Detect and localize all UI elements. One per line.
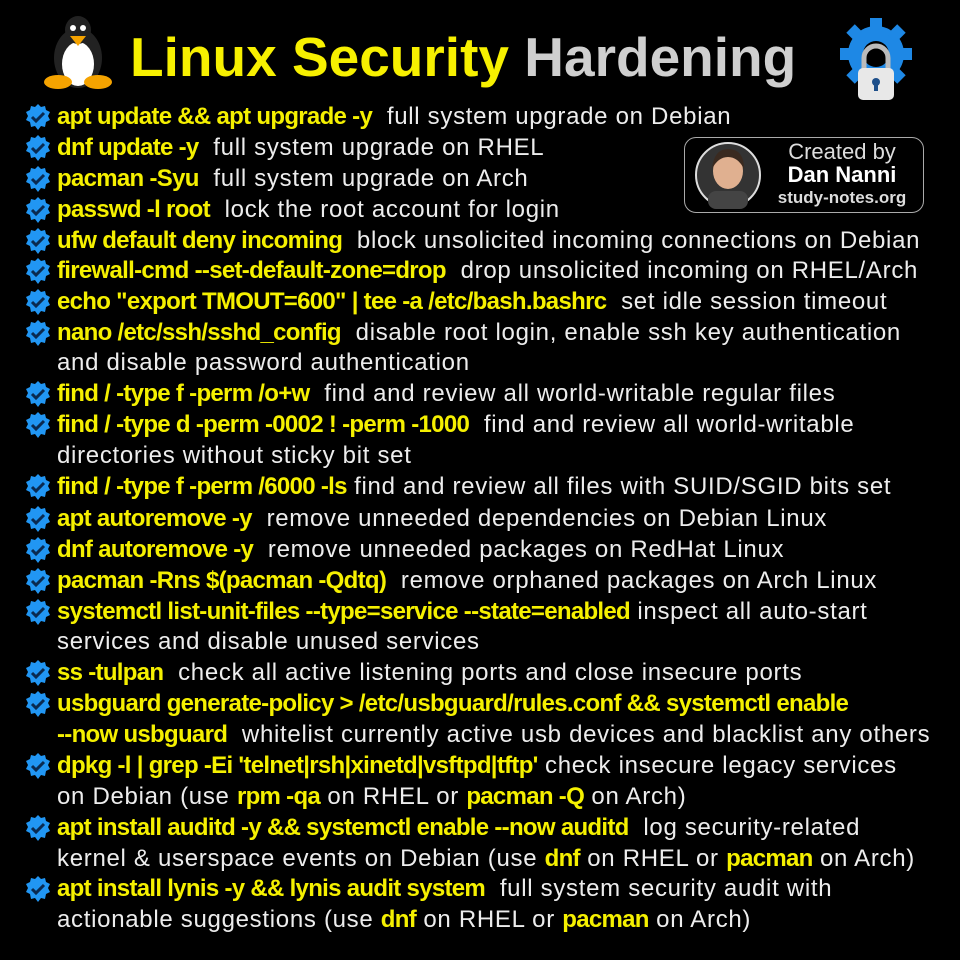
list of commands: pacman -Rns $(pacman -Qdtq) remove orphaned packages on Arch Linux — [57, 567, 877, 594]
list of commands: and disable password authentication — [57, 349, 470, 376]
list of commands: apt update && apt upgrade -y full system upgrade on Debian — [57, 103, 731, 130]
icon: avatar — [695, 142, 761, 209]
title: Linux Security Hardening — [130, 26, 796, 88]
list of commands: actionable suggestions (use dnf on RHEL or pacman on Arch) — [57, 906, 751, 933]
list of commands: services and disable unused services — [57, 628, 480, 655]
list of commands: passwd -l root lock the root account for login — [57, 196, 560, 223]
text: author — [778, 139, 906, 207]
list of commands: apt install auditd -y && systemctl enable --now auditd log security-related — [57, 814, 860, 841]
text: author: study-notes.org — [778, 188, 906, 207]
list of commands: pacman -Syu full system upgrade on Arch — [57, 165, 528, 192]
text: author: Created by — [788, 139, 896, 164]
list of commands: find / -type d -perm -0002 ! -perm -1000 find and review all world-writable — [57, 411, 854, 438]
list of commands: echo "export TMOUT=600" | tee -a /etc/bash.bashrc set idle session timeout — [57, 288, 887, 315]
list of commands: ss -tulpan check all active listening ports and close insecure ports — [57, 659, 802, 686]
list of commands: usbguard generate-policy > /etc/usbguard/rules.conf && systemctl enable — [57, 690, 848, 717]
list of commands: systemctl list-unit-files --type=service --state=enabled inspect all auto-start — [57, 598, 868, 625]
list of commands: directories without sticky bit set — [57, 442, 412, 469]
list of commands: kernel & userspace events on Debian (use dnf on RHEL or pacman on Arch) — [57, 845, 915, 872]
icon: penguin — [44, 16, 112, 89]
list of commands: --now usbguard whitelist currently active usb devices and blacklist any others — [57, 721, 930, 748]
icon: gear lock — [840, 18, 912, 100]
list of commands: dnf update -y full system upgrade on RHEL — [57, 134, 544, 161]
list of commands: apt autoremove -y remove unneeded dependencies on Debian Linux — [57, 505, 827, 532]
list of commands: find / -type f -perm /o+w find and review all world-writable regular files — [57, 380, 835, 407]
list of commands: firewall-cmd --set-default-zone=drop drop unsolicited incoming on RHEL/Arch — [57, 257, 918, 284]
callout: author badge — [684, 137, 924, 213]
list of commands: dnf autoremove -y remove unneeded packages on RedHat Linux — [57, 536, 784, 563]
list of commands: find / -type f -perm /6000 -ls find and review all files with SUID/SGID bits set — [57, 473, 891, 500]
list of commands: dpkg -l | grep -Ei 'telnet|rsh|xinetd|vsftpd|tftp' check insecure legacy services — [57, 752, 897, 779]
list of commands: apt install lynis -y && lynis audit system full system security audit with — [57, 875, 832, 902]
list of commands: nano /etc/ssh/sshd_config disable root login, enable ssh key authentication — [57, 319, 901, 346]
text: author: Dan Nanni — [788, 162, 896, 187]
list of commands: ufw default deny incoming block unsolicited incoming connections on Debian — [57, 227, 920, 254]
list of commands: on Debian (use rpm -qa on RHEL or pacman -Q on Arch) — [57, 783, 686, 810]
